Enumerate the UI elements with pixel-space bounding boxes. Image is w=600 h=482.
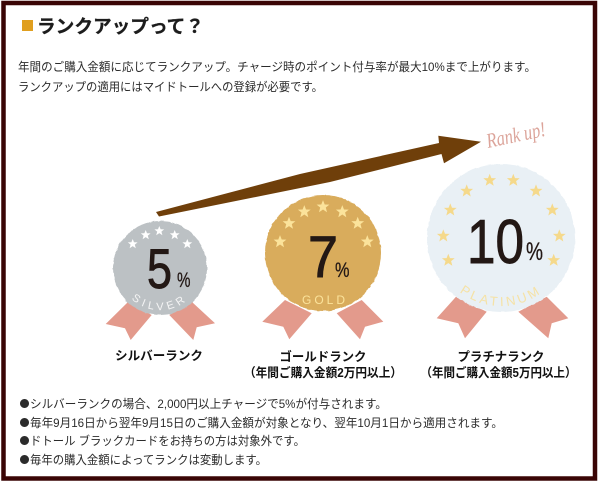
label: silver rank: シルバーランク xyxy=(115,349,203,363)
notes list: ● xyxy=(20,432,30,448)
rank word: PLATINUM xyxy=(460,285,540,306)
notes list xyxy=(20,396,503,467)
notes list: ● xyxy=(20,396,30,410)
intro text: 年間のご購入金額に応じてランクアップ。チャージ時のポイント付与率が最大10%まで上がります。 xyxy=(18,59,536,74)
badge: gold: % xyxy=(335,259,350,282)
notes list: 毎年9月16日から翌年9月15日のご購入金額が対象となり、翌年10月1日から適用されます。 xyxy=(30,415,503,430)
label: platinum rank xyxy=(420,350,576,380)
label: gold rank xyxy=(244,349,402,380)
badge: silver xyxy=(106,220,215,340)
notes list: ドトール ブラックカードをお持ちの方は対象外です。 xyxy=(30,433,305,448)
stars xyxy=(128,226,192,248)
notes list: シルバーランクの場合、2,000円以上チャージで5%が付与されます。 xyxy=(30,396,387,411)
intro text xyxy=(18,59,536,94)
notes list: 毎年の購入金額によってランクは変動します。 xyxy=(30,452,267,467)
rank word: SILVER xyxy=(132,294,185,310)
notes list: ● xyxy=(20,414,30,430)
rate: 7 xyxy=(308,225,338,290)
rate: 10 xyxy=(467,208,524,277)
title: ランクアップって？ xyxy=(37,16,204,37)
arrow: rank up xyxy=(156,136,481,216)
rank word: GOLD xyxy=(302,293,348,307)
ribbon xyxy=(437,297,568,338)
badge: platinum: % xyxy=(526,238,543,266)
ribbon xyxy=(106,302,215,340)
label: gold rank: （年間ご購入金額2万円以上） xyxy=(244,365,402,380)
stars xyxy=(274,200,374,247)
badge: silver: % xyxy=(177,269,190,292)
icon: title square xyxy=(22,20,33,31)
label: gold rank: ゴールドランク xyxy=(280,349,366,364)
badge: gold xyxy=(262,195,383,339)
rate: 5 xyxy=(147,237,172,300)
stars xyxy=(437,174,566,266)
ribbon xyxy=(262,300,383,339)
notes list: ● xyxy=(20,452,30,466)
intro text: ランクアップの適用にはマイドトールへの登録が必要です。 xyxy=(18,79,323,94)
rank up label: Rank up! xyxy=(483,117,548,153)
label: platinum rank: プラチナランク xyxy=(458,350,544,364)
badge: platinum xyxy=(427,164,576,338)
label: platinum rank: （年間ご購入金額5万円以上） xyxy=(420,365,576,380)
